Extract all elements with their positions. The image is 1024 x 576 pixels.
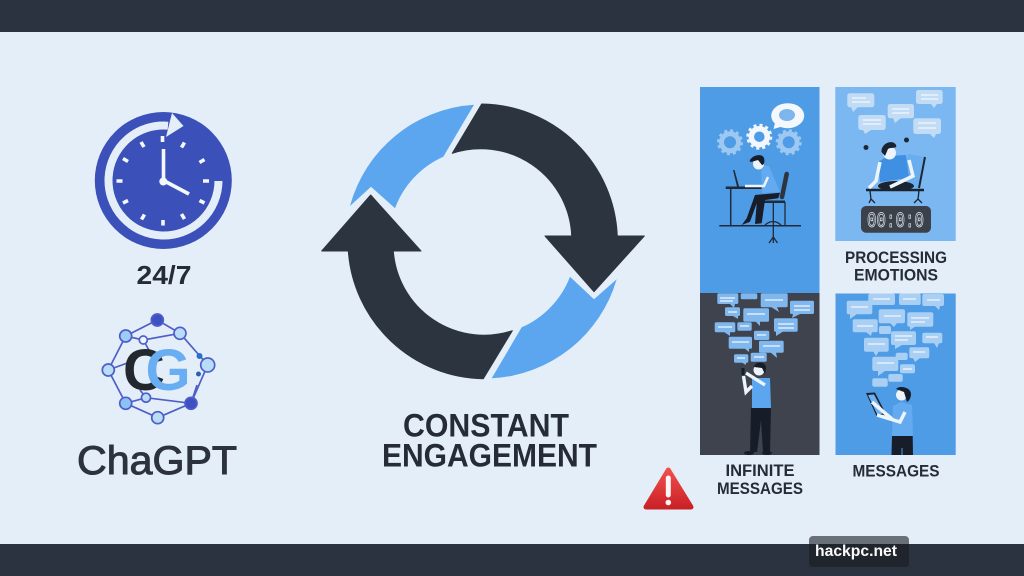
- heading: constant engagement: [382, 408, 597, 474]
- figure: man with phone: [742, 363, 772, 455]
- top bar: [0, 0, 1024, 32]
- heading: constant engagement: ENGAGEMENT: [382, 438, 597, 474]
- icon: speech bubble: [771, 103, 804, 129]
- digital timer: 00:0:0: [867, 209, 924, 234]
- label: 24/7: 24/7: [136, 260, 192, 290]
- digital timer: [861, 206, 931, 234]
- chat bubbles: [847, 294, 944, 387]
- dark arrow top right: [452, 104, 644, 292]
- panel: messages: [836, 294, 956, 455]
- panel: working at desk: [700, 87, 820, 294]
- figure: man with tablet: [866, 387, 913, 455]
- watermark: hackpc.net: [815, 543, 898, 560]
- icon: gears: [718, 125, 800, 154]
- heading: constant engagement: CONSTANT: [403, 408, 569, 444]
- label: messages: MESSAGES: [852, 462, 940, 480]
- panel: processing emotions: [835, 87, 956, 241]
- figure: seated man: [866, 142, 925, 203]
- label: processing emotions: [845, 248, 947, 284]
- bottom bar: [0, 544, 1024, 576]
- chat bubbles: [847, 90, 943, 138]
- blue segment bottom right: [492, 277, 617, 378]
- chat bubbles: [715, 293, 814, 365]
- stress marks: [864, 138, 909, 150]
- logo: network CG: [102, 314, 215, 424]
- icon: 24/7 clock: [95, 112, 232, 249]
- blue segment top left: [350, 105, 474, 208]
- label: infinite messages: INFINITE: [726, 461, 794, 480]
- figure: man at laptop: [719, 155, 801, 243]
- panel: infinite messages: [700, 293, 820, 455]
- cycle arrows: [322, 104, 644, 379]
- logo: network CG: G: [145, 338, 191, 403]
- watermark: [809, 536, 909, 567]
- label: processing emotions: PROCESSING: [845, 248, 947, 267]
- logo: network CG: C: [123, 338, 165, 403]
- label: ChaGPT: ChaGPT: [77, 439, 237, 483]
- dark arrow bottom left: [322, 195, 512, 379]
- label: processing emotions: EMOTIONS: [854, 266, 938, 284]
- icon: warning triangle: [646, 470, 691, 507]
- label: infinite messages: MESSAGES: [717, 479, 803, 498]
- label: infinite messages: [717, 461, 803, 498]
